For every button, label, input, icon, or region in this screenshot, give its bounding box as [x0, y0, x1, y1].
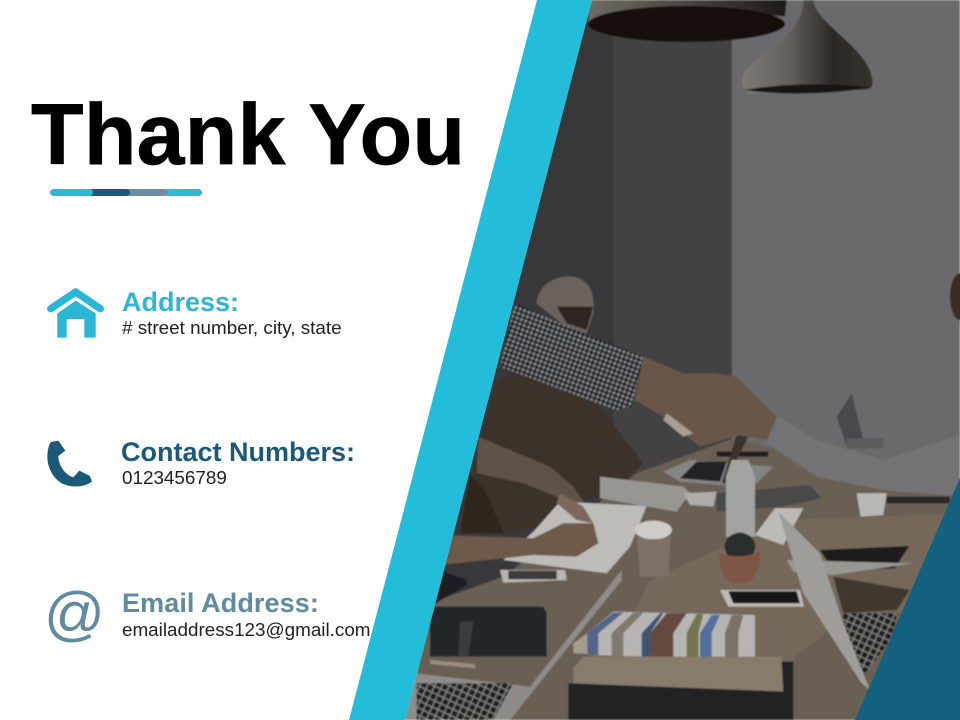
icon: at sign: @	[44, 580, 105, 647]
contact block	[47, 437, 355, 488]
heading: address: Address:	[122, 287, 239, 317]
documents back	[600, 477, 690, 512]
photo: handshake at meeting table	[383, 0, 960, 720]
checked shirt arm	[500, 303, 643, 410]
email block	[44, 580, 371, 647]
clasped hands	[635, 357, 777, 447]
scene drawn in zoom coordinates	[383, 273, 960, 720]
background photo and diagonal bands	[349, 0, 960, 720]
dark blue corner triangle	[855, 478, 960, 720]
cup behind sleeve	[857, 493, 887, 517]
striped book	[573, 612, 755, 660]
seated man shirt	[473, 367, 643, 533]
notebook left	[430, 607, 547, 657]
pendant lamps	[588, 0, 873, 94]
binder stack	[573, 657, 783, 692]
cup	[637, 537, 671, 577]
bottom left laptop	[400, 570, 622, 720]
icon: phone	[47, 440, 92, 486]
paper	[503, 502, 647, 573]
chair dark left	[435, 572, 467, 604]
heading: email address: Email Address:	[122, 588, 319, 618]
plant	[725, 533, 755, 561]
head edge at right	[950, 273, 960, 320]
tablet	[820, 546, 909, 570]
woman's arm and hands	[440, 523, 598, 565]
icon: house	[47, 288, 104, 338]
text: phone number: 0123456789	[122, 467, 227, 488]
title: Thank You	[31, 87, 465, 183]
cyan diagonal band	[349, 0, 592, 720]
text: email value: emailaddress123@gmail.com	[122, 619, 371, 640]
right sleeve	[767, 417, 960, 497]
open laptop	[842, 613, 897, 680]
walls	[444, 6, 614, 598]
head	[537, 276, 594, 333]
paper pieces	[755, 508, 803, 545]
accent bar	[50, 189, 202, 196]
grey device	[717, 485, 822, 512]
text: address value: # street number, city, state	[122, 317, 342, 338]
back laptop on table	[663, 460, 773, 485]
bottle	[726, 460, 755, 537]
back laptop	[836, 394, 863, 445]
heading: contact numbers: Contact Numbers:	[121, 437, 355, 467]
table	[383, 438, 960, 720]
address block	[47, 287, 342, 338]
phones	[500, 570, 567, 583]
